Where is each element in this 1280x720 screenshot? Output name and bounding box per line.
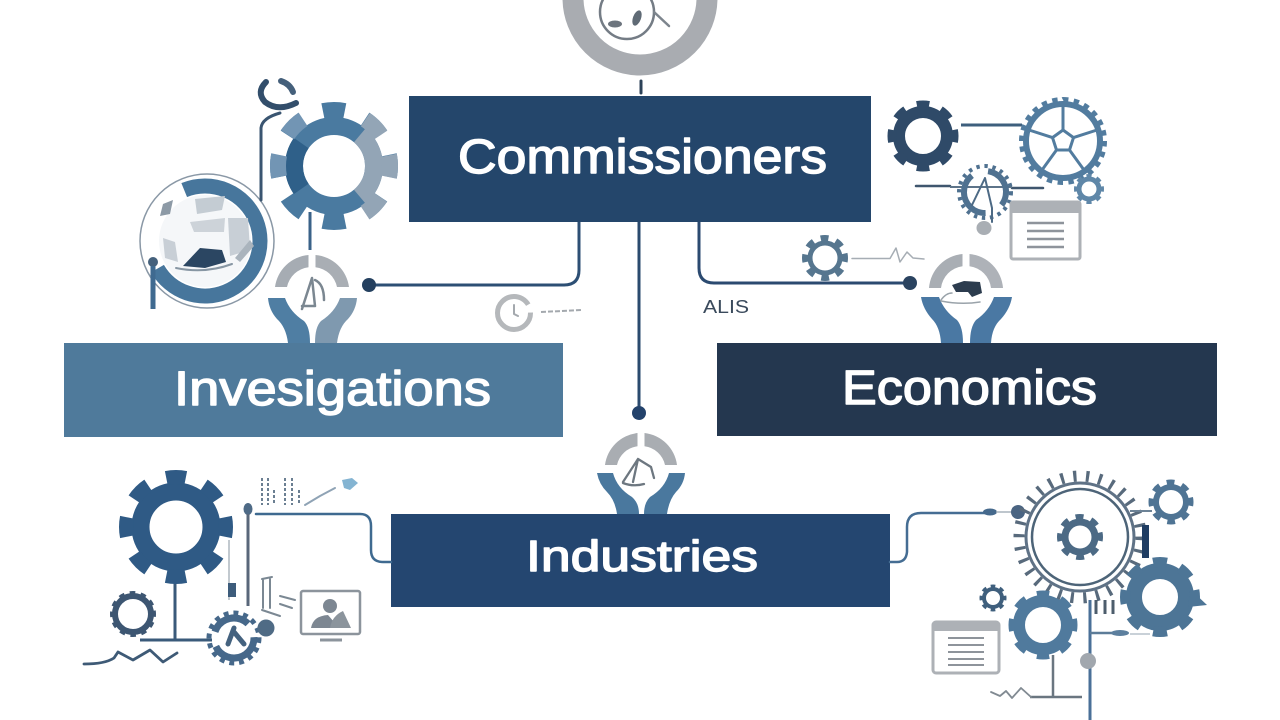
panel: Industries: Industries: [526, 532, 758, 581]
panel: Investigations: Invesigations: [174, 363, 491, 416]
icon: document bottom right: [933, 622, 999, 673]
icon: bottom left large gear: [126, 477, 226, 640]
panel: Investigations: [64, 343, 563, 437]
icon: right hands and ring: [921, 254, 1012, 343]
icon: top right spoked wheel: [961, 100, 1104, 202]
panel: Economics: Economics: [842, 362, 1097, 415]
icon: bottom right big gear: [1125, 562, 1207, 632]
icon: top magnifier ring: [573, 0, 707, 65]
icon: monitor with person: [301, 591, 360, 640]
panel: Commissioners: [409, 96, 871, 222]
icon: bottom right small gears: [981, 482, 1191, 610]
icon: left hands and ring: [268, 255, 357, 343]
icon: pin and connector to Industries: [228, 503, 391, 616]
icon: top right dark gear: [892, 105, 954, 167]
icon: broken gear on rail: [916, 166, 1043, 235]
connector lines from Commissioners: [362, 81, 917, 420]
icon: faint clock with tail: [498, 296, 582, 330]
icon: center hands and ring: [597, 433, 685, 514]
panel: Commissioners: Commissioners: [458, 131, 827, 184]
icon: globe with crescent: [133, 169, 277, 313]
panel: Economics: [717, 343, 1217, 436]
icon: bottom left small gear and pulse: [84, 593, 177, 664]
panel: Industries: [391, 514, 890, 607]
icon: large segmented gear: [256, 88, 412, 250]
icon: document top right: [1011, 202, 1080, 259]
icon: bottom right stem and pulse: [991, 600, 1150, 720]
icon: bottom right connector: [890, 505, 1025, 562]
icon: bottom left broken gear: [208, 612, 274, 664]
icon: data marks: [262, 478, 358, 505]
icon: small gear with pulse line: [805, 238, 924, 278]
icon: bottom right ringed gear: [1019, 476, 1152, 614]
label: ALIS: ALIS: [703, 297, 749, 317]
icon: bottom right medium gear: [1013, 595, 1073, 655]
icon: small ring on stem: [261, 81, 296, 200]
